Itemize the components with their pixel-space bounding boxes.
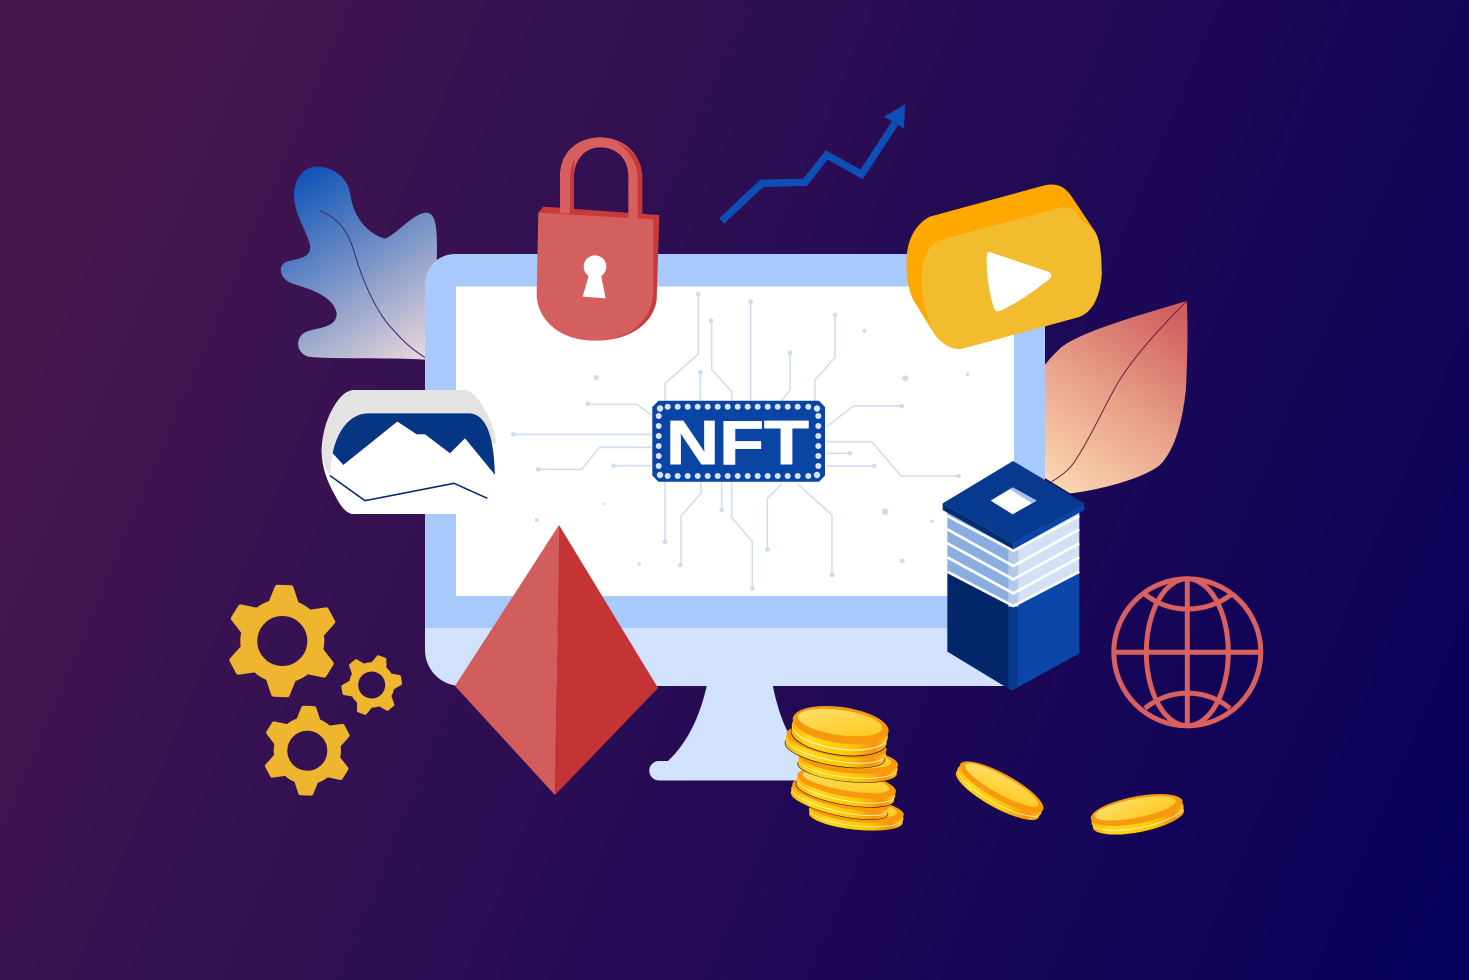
server lower left [947,570,1012,691]
white stripes [947,516,1079,606]
icon: tilted coin [950,753,1049,829]
monitor screen [456,286,1014,596]
chip border dots [656,404,821,479]
server cap [943,503,1013,549]
icon: padlock [537,137,659,341]
icon: blue leaf [281,167,437,361]
play button back [907,185,1102,349]
shackle outer shade [615,141,642,218]
chip body [652,401,825,482]
skyline line [330,476,487,501]
server lower right [1012,570,1079,691]
badge background [322,390,497,514]
cap square [991,487,1037,514]
lock body [537,213,653,341]
icon: server block [943,461,1084,691]
monitor frame [425,254,1045,628]
shackle inner shade [570,158,575,213]
icon: orange leaf [1040,301,1188,493]
mountain snow fill [330,422,495,493]
play triangle [987,252,1051,311]
icon: play button [907,185,1102,349]
icon: mountain image badge [322,390,497,514]
icon: flat coin [1088,788,1187,841]
monitor chin [425,620,1045,686]
monitor stand [649,680,830,780]
icon: small gear [336,649,408,721]
NFT chip [652,401,825,482]
computer monitor [425,254,1045,780]
mountain sky [333,413,495,475]
icon: globe [1114,579,1261,726]
server centre strip [1008,606,1018,691]
icon: growth arrow [722,104,905,221]
shackle [560,137,642,218]
play button face [922,207,1102,349]
icon: medium gear [264,707,350,795]
icon: large gear [229,586,336,696]
server upper right [1013,512,1079,607]
circuit lines [511,292,969,591]
keyhole [583,255,606,298]
badge grey top [322,390,496,477]
shackle legs [560,207,638,218]
NFT label: NFT [666,409,809,478]
server upper centre [1008,548,1018,607]
icon: Ethereum diamond [455,525,658,795]
icon: coin stack [783,700,905,835]
lock back side [538,207,659,341]
server upper left [947,512,1013,607]
